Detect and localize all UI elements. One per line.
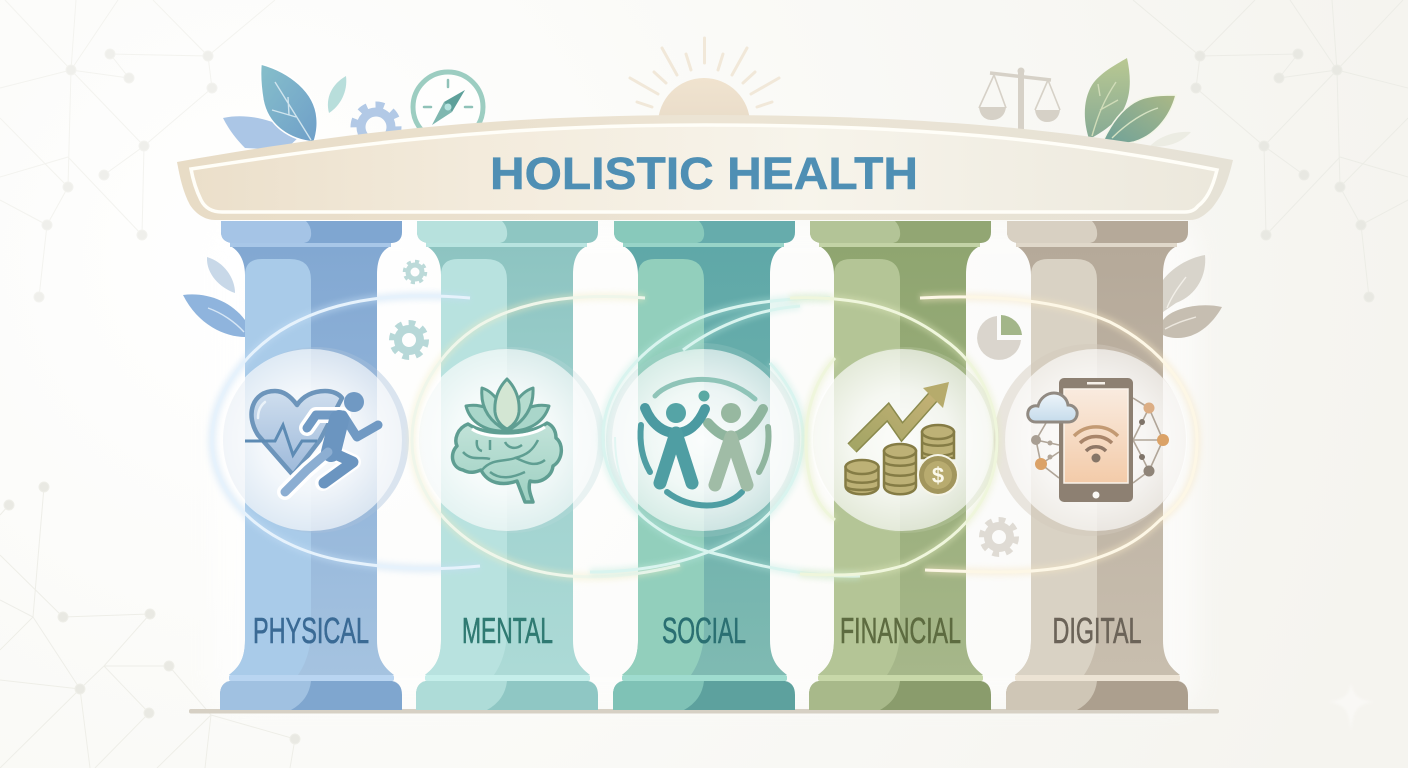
roof entablature <box>177 115 1233 220</box>
label: physical: PHYSICAL <box>253 610 369 651</box>
label: social: SOCIAL <box>662 610 746 651</box>
glowing ring: social <box>590 298 860 576</box>
pillar: financial <box>809 221 991 710</box>
icon: lotus and brain <box>452 379 561 502</box>
icon: compass <box>413 72 483 142</box>
icon: pie chart <box>977 315 1022 360</box>
icon: balance scales <box>979 68 1060 133</box>
icon: gear <box>392 323 426 357</box>
icon: two people in community circle <box>640 379 769 506</box>
pillar: social <box>613 221 795 710</box>
glowing ring: digital <box>920 297 1197 572</box>
floor line <box>189 709 1219 714</box>
icon: small gear <box>404 262 426 282</box>
pillar: digital <box>1006 221 1188 710</box>
leaves beside digital pillar <box>1163 255 1222 338</box>
leaves top right <box>1085 58 1191 146</box>
icon: heart and runner <box>245 391 378 492</box>
icon: rising sun <box>630 38 779 170</box>
label: financial: FINANCIAL <box>840 610 961 651</box>
icon: growth arrow and coins <box>846 382 959 496</box>
icon: gear on roof <box>354 105 398 149</box>
soft halo behind pillars <box>212 225 1197 705</box>
pillar: physical <box>220 221 402 710</box>
glowing ring: physical <box>212 296 480 569</box>
label: digital: DIGITAL <box>1052 610 1142 651</box>
icon: tablet with cloud wifi and network <box>1028 378 1169 502</box>
icon: growth arrow and coins: $ <box>932 463 944 488</box>
leaves top left <box>223 64 346 150</box>
medallion discs <box>220 343 1187 537</box>
glowing ring: financial <box>790 298 997 575</box>
network pattern bottom left <box>0 482 300 768</box>
icon: gear lower <box>982 520 1016 554</box>
sparkle <box>1328 683 1374 731</box>
glowing ring: mental <box>412 296 680 577</box>
leaves beside physical pillar <box>183 257 245 337</box>
title: HOLISTIC HEALTH <box>490 148 918 199</box>
network pattern top right <box>1133 0 1408 302</box>
pillar: mental <box>416 221 598 710</box>
label: mental: MENTAL <box>462 610 553 651</box>
network pattern top left <box>0 0 275 302</box>
